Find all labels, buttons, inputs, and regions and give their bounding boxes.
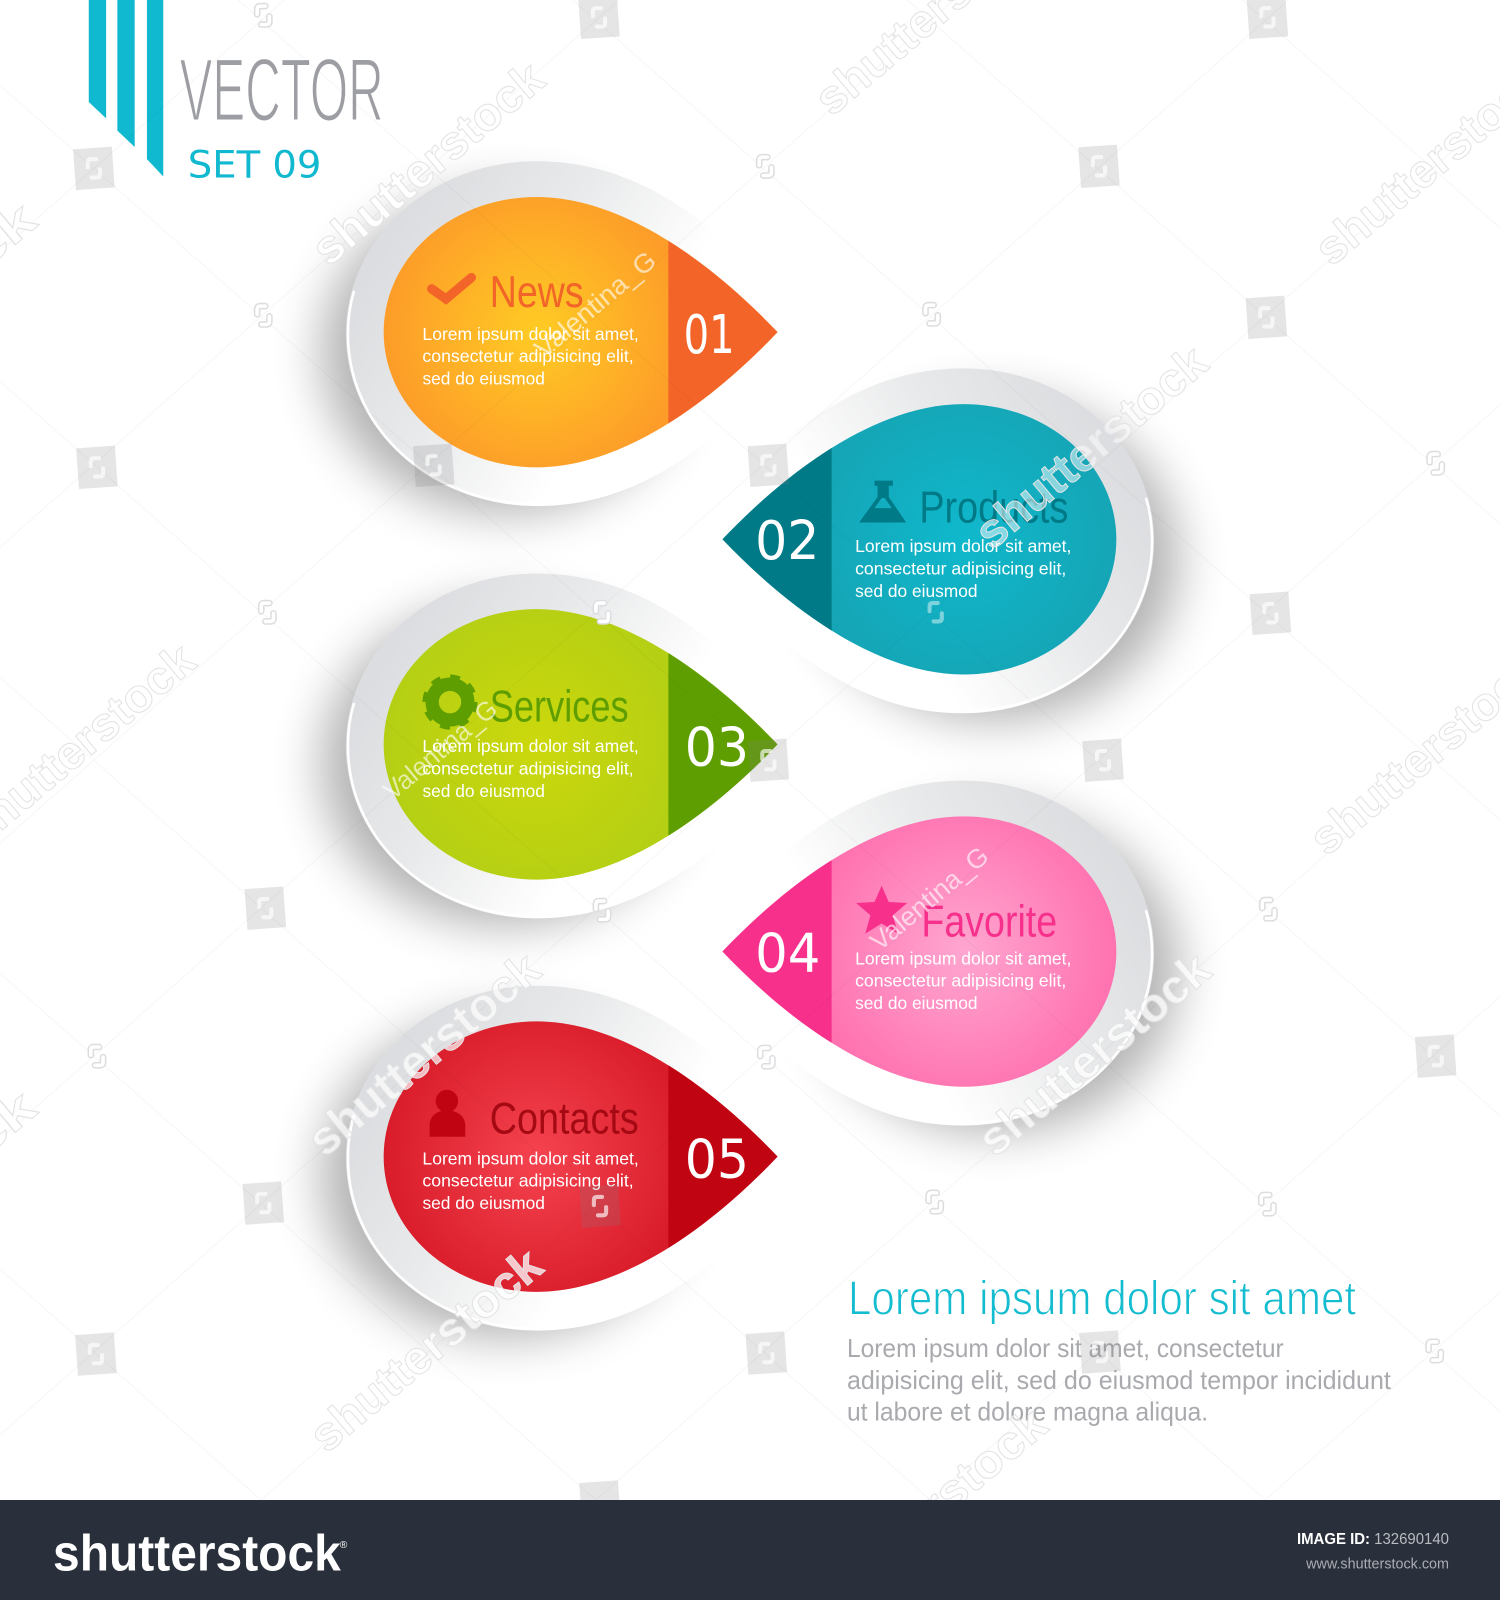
text: Products body: consectetur adipisicing elit, bbox=[855, 558, 1066, 578]
text: News body: sed do eiusmod bbox=[422, 369, 545, 389]
heading: lorem ipsum: Lorem ipsum dolor sit amet bbox=[848, 1272, 1356, 1325]
panel: 01 News bbox=[384, 197, 778, 467]
number: 05: 05 bbox=[685, 1129, 749, 1191]
footer trademark: ® bbox=[340, 1540, 348, 1551]
footer image id: IMAGE ID: 132690140 bbox=[1297, 1531, 1449, 1548]
footer url: www.shutterstock.com bbox=[1305, 1556, 1449, 1572]
watermark text: shutterstock bbox=[965, 335, 1218, 559]
text block: description bbox=[847, 1335, 1391, 1426]
text: Services body: consectetur adipisicing elit, bbox=[422, 758, 634, 778]
watermark text: shutterstock bbox=[300, 1238, 553, 1462]
icon: person bbox=[430, 1090, 465, 1137]
text: Products body: Lorem ipsum dolor sit amet, bbox=[855, 536, 1071, 556]
text block: description: Lorem ipsum dolor sit amet, consectetur bbox=[847, 1335, 1284, 1363]
text: Favorite body: sed do eiusmod bbox=[855, 993, 978, 1013]
text: Services body bbox=[422, 736, 639, 801]
heading: Favorite: Favorite bbox=[921, 896, 1057, 947]
drop rings bbox=[346, 161, 1154, 1331]
number: 03: 03 bbox=[685, 716, 749, 778]
icon: star bbox=[856, 886, 907, 934]
text: Contacts body: Lorem ipsum dolor sit amet, bbox=[422, 1148, 639, 1168]
text block: description: ut labore et dolore magna aliqua. bbox=[847, 1398, 1208, 1426]
text: Contacts body: consectetur adipisicing elit, bbox=[422, 1171, 634, 1191]
footer bar bbox=[0, 1500, 1500, 1600]
heading: Services: Services bbox=[490, 680, 629, 731]
text: Favorite body: Lorem ipsum dolor sit amet, bbox=[855, 948, 1071, 968]
watermark text: shutterstock bbox=[302, 51, 555, 275]
text: Services body: sed do eiusmod bbox=[422, 781, 545, 801]
icon: gear bbox=[426, 678, 474, 727]
drop shadows bbox=[321, 191, 1179, 1338]
text: News body: Lorem ipsum dolor sit amet, bbox=[422, 324, 639, 344]
title: VECTOR: VECTOR bbox=[180, 40, 384, 139]
icon: flask bbox=[859, 481, 906, 522]
number: 02: 02 bbox=[755, 510, 819, 572]
text: Contacts body: sed do eiusmod bbox=[422, 1193, 545, 1213]
text: Favorite body bbox=[855, 948, 1071, 1013]
text: Products body: sed do eiusmod bbox=[855, 581, 978, 601]
text: Favorite body: consectetur adipisicing elit, bbox=[855, 971, 1066, 991]
footer logo: shutterstock bbox=[53, 1524, 341, 1581]
watermark text: shutterstock bbox=[968, 942, 1221, 1166]
logo stripes bbox=[89, 0, 163, 177]
panel: 05 Contacts bbox=[384, 1021, 778, 1292]
watermark text: rstock bbox=[910, 1397, 1057, 1532]
panel: 04 Favorite bbox=[722, 816, 1116, 1087]
panel: 02 Products bbox=[722, 404, 1116, 674]
text: News body: consectetur adipisicing elit, bbox=[422, 346, 634, 366]
watermark text: shutterstock bbox=[297, 942, 550, 1166]
heading: News: News bbox=[490, 266, 584, 317]
panel: 03 Services bbox=[384, 609, 778, 880]
watermark text: Valentina_G bbox=[377, 693, 503, 806]
text: Products body bbox=[855, 536, 1071, 601]
subtitle: SET 09: SET 09 bbox=[188, 143, 321, 187]
text: News body bbox=[422, 324, 639, 389]
text: Contacts body bbox=[422, 1148, 639, 1213]
text: Services body: Lorem ipsum dolor sit amet, bbox=[422, 736, 639, 756]
number: 04: 04 bbox=[755, 922, 820, 984]
text block: description: adipisicing elit, sed do eiusmod tempor incididunt bbox=[847, 1367, 1391, 1395]
watermark text: Valentina_G bbox=[528, 245, 662, 364]
heading: Products: Products bbox=[919, 481, 1068, 532]
number: 01: 01 bbox=[684, 304, 735, 366]
watermark small icons bbox=[91, 6, 1442, 1360]
watermark text: Valentina_G bbox=[864, 841, 994, 957]
icon: check mark bbox=[432, 278, 471, 299]
heading: Contacts: Contacts bbox=[490, 1093, 639, 1144]
